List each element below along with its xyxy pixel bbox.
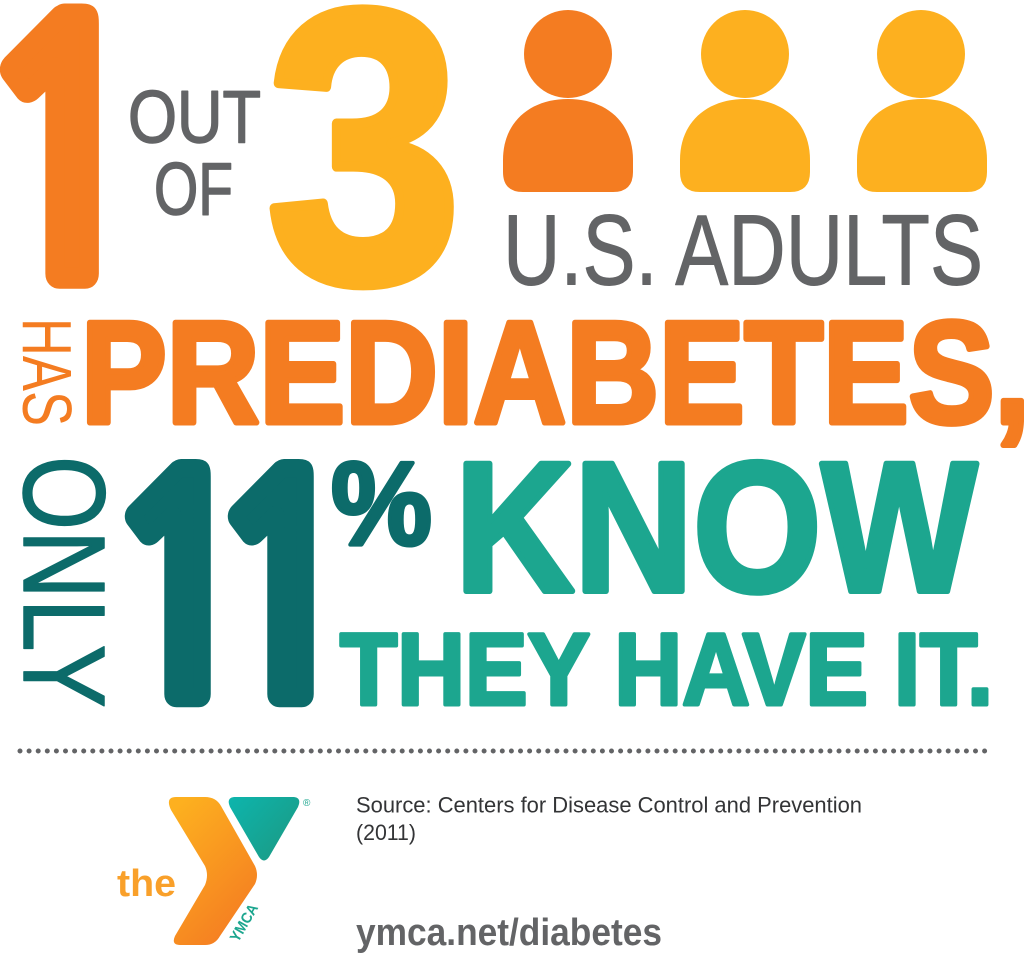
heading: know: KNOW bbox=[455, 425, 977, 631]
statistic: 11: 1 bbox=[201, 444, 368, 743]
logo text: YMCA: YMCA bbox=[227, 901, 262, 945]
logo: the Y bbox=[117, 797, 311, 945]
percent sign: % bbox=[331, 438, 432, 570]
statistic: 11 bbox=[98, 444, 368, 743]
source text bbox=[356, 792, 862, 845]
icon: orange person bbox=[503, 10, 633, 192]
url: ymca.net/diabetes bbox=[356, 912, 662, 954]
text: only (rotated): ONLY bbox=[0, 456, 129, 708]
statistic: 11: 1 bbox=[98, 444, 265, 743]
source text: Source: Centers for Disease Control and Prevention bbox=[356, 792, 862, 818]
logo text: the: the bbox=[117, 863, 176, 905]
logo triangle bbox=[229, 797, 299, 860]
text: out of bbox=[128, 76, 261, 230]
logo registered mark: ® bbox=[303, 798, 311, 809]
source text: (2011) bbox=[356, 820, 416, 845]
text: out of: OUT bbox=[128, 76, 261, 158]
icon: yellow person bbox=[857, 10, 987, 192]
text: has (rotated): HAS bbox=[8, 318, 86, 426]
text: out of: OF bbox=[154, 148, 233, 230]
logo chevron bbox=[169, 797, 257, 945]
icon: yellow person bbox=[680, 10, 810, 192]
